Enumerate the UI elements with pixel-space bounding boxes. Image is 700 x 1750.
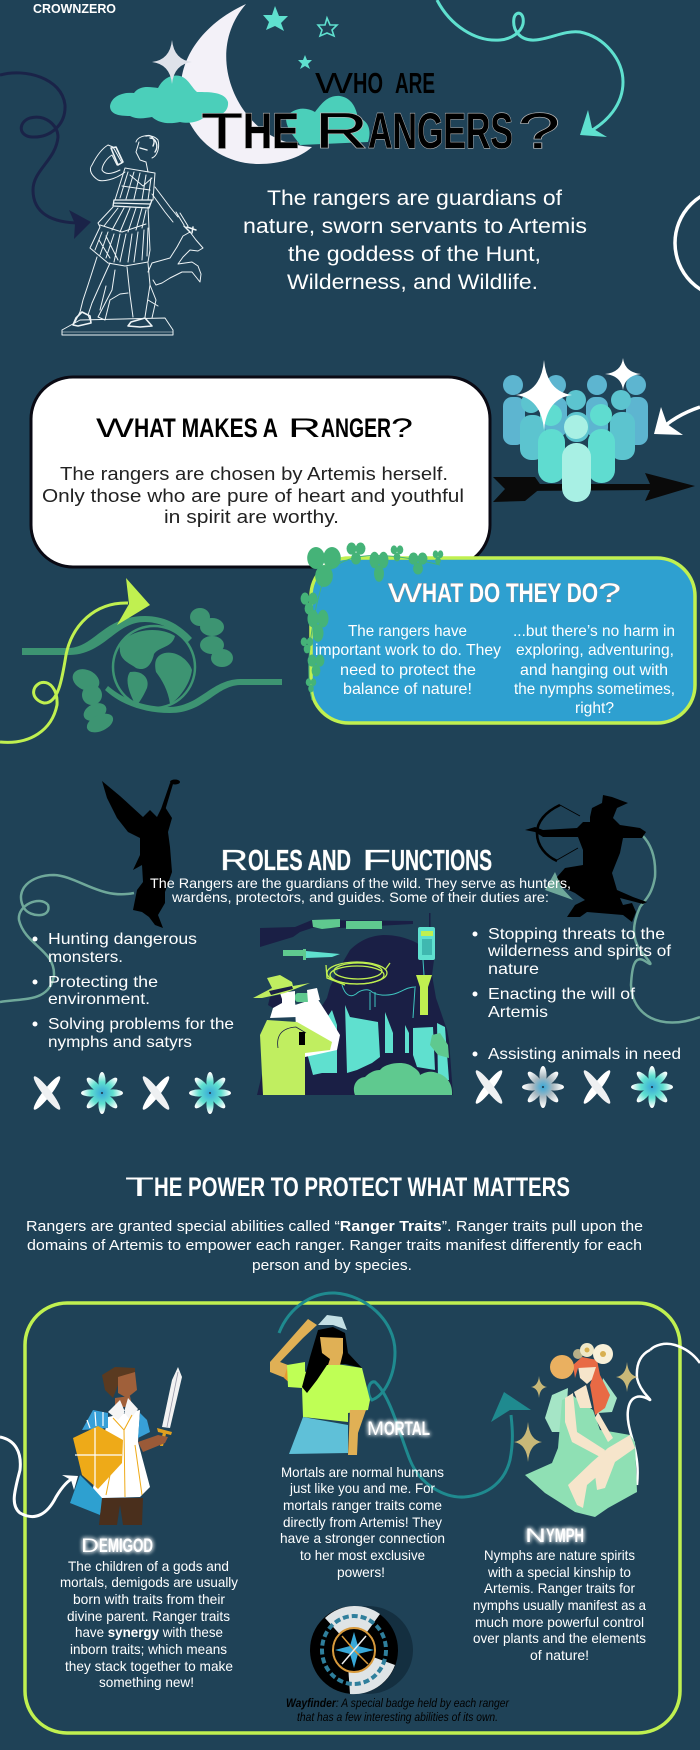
title: The Rangers?: ANGERS	[368, 103, 513, 159]
list: left duties: Protecting the	[48, 974, 158, 991]
heading: the power to protect: T	[125, 1172, 154, 1202]
icon: wayfinder badge	[310, 1606, 413, 1694]
illustration: globe with leaves	[22, 608, 282, 736]
arrow: teal loop around mortal	[279, 1293, 531, 1497]
label: demigod: D	[81, 1536, 99, 1557]
arrow: sage curl left	[0, 875, 134, 1002]
label: mortal: ORTAL	[384, 1419, 430, 1440]
icon: filled star	[263, 6, 288, 31]
list: right duties: Assisting animals in need	[488, 1046, 681, 1063]
list: left duties: Hunting dangerous	[48, 931, 197, 948]
icon: cloud left	[110, 76, 228, 123]
text: demigod description: divine parent. Ranger traits	[67, 1608, 230, 1624]
ranger head	[270, 995, 297, 1018]
list: right duties: Stopping threats to the	[488, 926, 665, 943]
rope	[326, 962, 390, 985]
heading: roles and functions: F	[362, 845, 391, 877]
icon: sparkle	[152, 40, 192, 84]
title: Who Are: HO	[353, 68, 383, 100]
text: chosen by Artemis: in spirit are worthy.	[164, 507, 339, 527]
text: wayfinder caption: Wayfinder: A special badge held by each ranger	[286, 1698, 510, 1710]
text: demigod description: The children of a gods and	[68, 1558, 229, 1574]
text: roles intro: The Rangers are the guardians of the wild. They serve as hunters,	[150, 875, 571, 891]
arrow: sage curl right	[545, 835, 700, 1023]
text: mortal description: have a stronger connection	[280, 1530, 445, 1546]
heading: the power to protect: HE POWER TO PROTECT WHAT MATTERS	[154, 1172, 570, 1202]
logo: CrownZero: CROWNZERO	[33, 1, 116, 16]
text: nymph description: of nature!	[530, 1647, 589, 1663]
label: nymph: YMPH	[546, 1526, 584, 1547]
arrow: navy curl	[0, 73, 91, 239]
text: wayfinder caption	[286, 1698, 510, 1724]
text: no harm in exploring	[513, 623, 675, 717]
intro paragraph: the goddess of the Hunt,	[288, 243, 541, 266]
text: mortal description: directly from Artemis! They	[283, 1514, 442, 1530]
list: right duties: Enacting the will of	[488, 986, 636, 1003]
title: Who Are	[315, 68, 435, 100]
ranger arm	[295, 998, 340, 1057]
silhouette: angel with trumpet	[102, 780, 180, 928]
text: mortal description: just like you and me. For	[289, 1480, 435, 1496]
text: nymph description: over plants and the elements	[473, 1630, 646, 1646]
text: nymph description	[473, 1547, 646, 1663]
arrow: white curl near nymph	[628, 1350, 650, 1485]
title: The Rangers?: R	[315, 103, 368, 159]
list: left duties: monsters.	[48, 949, 123, 966]
title: Who Are: W	[315, 68, 354, 100]
title: The Rangers?: ?	[518, 103, 560, 159]
list: right duties: Artemis	[488, 1004, 548, 1021]
text: demigod description: something new!	[99, 1674, 194, 1690]
text: important work	[315, 623, 501, 698]
text: nymph description: Artemis. Ranger traits for	[484, 1580, 635, 1596]
list: left duties: environment.	[48, 991, 150, 1008]
arrow: white loop top right	[650, 1344, 700, 1363]
heading: what do they do: HAT DO THEY DO	[422, 578, 598, 608]
text: demigod description: inborn traits; which means	[70, 1641, 227, 1657]
text: mortal description: Mortals are normal humans	[281, 1464, 444, 1480]
flashlight	[416, 975, 432, 1015]
ranger body	[260, 1020, 332, 1095]
heading: what makes a ranger: HAT MAKES A	[134, 413, 278, 443]
label: demigod	[81, 1536, 153, 1557]
intro paragraph: nature, sworn servants to Artemis	[243, 215, 587, 238]
text: no harm in exploring: right?	[575, 700, 614, 717]
text: mortal description: to her most exclusive	[300, 1547, 425, 1563]
label: nymph: N	[525, 1526, 546, 1547]
title: Who Are: ARE	[395, 68, 435, 100]
label: nymph	[525, 1526, 584, 1547]
heading: roles and functions: R	[220, 845, 248, 877]
intro paragraph	[243, 187, 587, 294]
text: mortal description	[280, 1464, 445, 1580]
text: nymph description: much more powerful control	[475, 1614, 644, 1630]
text: ranger traits intro: domains of Artemis to empower each ranger. Ranger traits manifest differently for each	[27, 1237, 642, 1254]
arrow: teal curl	[437, 0, 623, 137]
title: The Rangers?: HE	[243, 103, 299, 159]
heading: what makes a ranger: ANGER	[321, 413, 391, 443]
dark backdrop	[257, 935, 453, 1095]
icon: cloud right	[286, 96, 370, 145]
text: chosen by Artemis	[42, 464, 464, 527]
text: important work: The rangers have	[348, 623, 467, 640]
trees	[307, 1005, 449, 1080]
ring: white arc at right	[675, 188, 700, 298]
vines	[342, 960, 424, 1018]
text: demigod description: they stack together to make	[65, 1658, 233, 1674]
list: right duties: wilderness and spirits of	[487, 943, 672, 960]
label: mortal	[367, 1419, 430, 1440]
text: mortal description: powers!	[337, 1564, 385, 1580]
illustration: Artemis statue with deer	[62, 136, 203, 335]
heading: roles and functions: OLES AND	[248, 845, 351, 877]
list: left duties	[32, 931, 234, 1051]
panel: what do they do	[311, 558, 695, 723]
heading: what makes a ranger	[96, 413, 413, 443]
text: wayfinder caption: that has a few interesting abilities of its own.	[297, 1712, 498, 1724]
text: demigod description: have synergy with these	[75, 1624, 223, 1640]
text: chosen by Artemis: The rangers are chosen by Artemis herself.	[60, 464, 448, 484]
icon: crowd of people	[503, 358, 648, 502]
decoration: clover vine	[301, 543, 443, 700]
text: chosen by Artemis: Only those who are pure of heart and youthful	[42, 486, 464, 506]
text: demigod description: mortals, demigods are usually	[60, 1574, 238, 1590]
text: demigod description: born with traits from their	[73, 1591, 225, 1607]
text: nymph description: with a special kinship to	[487, 1564, 631, 1580]
text: no harm in exploring: exploring, adventuring,	[516, 642, 674, 659]
illustration: ranger with gear	[253, 913, 453, 1095]
label: demigod: EMIGOD	[99, 1536, 153, 1557]
radio	[418, 913, 435, 960]
knife	[283, 949, 340, 960]
text: no harm in exploring: the nymphs sometimes,	[514, 681, 675, 698]
list: left duties: nymphs and satyrs	[48, 1034, 192, 1051]
heading: what do they do: ?	[598, 578, 621, 608]
label: mortal: M	[367, 1419, 384, 1440]
text: ranger traits intro	[26, 1218, 643, 1274]
bush	[354, 1063, 452, 1095]
text: important work: important work to do. They	[315, 642, 501, 659]
text: mortal description: mortals ranger traits come	[283, 1497, 442, 1513]
arrow: white curl to demigod	[0, 1437, 78, 1517]
text: no harm in exploring: and hanging out with	[520, 662, 668, 679]
icon: crescent moon	[181, 4, 312, 164]
illustration: nymph figure	[525, 1343, 637, 1517]
title: The Rangers?: T	[201, 103, 243, 159]
decoration: nymph sparkles	[514, 1362, 638, 1462]
arrow: white arrow to crowd	[654, 407, 700, 435]
list: right duties: nature	[488, 961, 539, 978]
list: left duties: Solving problems for the	[48, 1016, 234, 1033]
heading: roles and functions	[220, 845, 492, 877]
text: nymph description: Nymphs are nature spirits	[484, 1547, 635, 1563]
text: important work: balance of nature!	[343, 681, 472, 698]
arrow: black arrow behind crowd	[493, 473, 695, 502]
text: ranger traits intro: person and by species.	[252, 1257, 412, 1274]
title: The Rangers?	[201, 103, 560, 159]
icon: outline star	[318, 18, 337, 36]
intro paragraph: The rangers are guardians of	[267, 187, 562, 210]
illustration: demigod figure	[70, 1367, 182, 1525]
panel: what makes a ranger	[31, 377, 490, 567]
decoration: left flowers	[31, 1072, 231, 1114]
arrow: lime curl to globe	[0, 578, 150, 742]
text: roles intro: wardens, protectors, and guides. Some of their duties are:	[171, 889, 549, 905]
heading: roles and functions: UNCTIONS	[391, 845, 492, 877]
silhouette: archer	[525, 795, 647, 922]
text: demigod description	[60, 1558, 238, 1690]
text: nymph description: nymphs usually manifest as a	[473, 1597, 646, 1613]
icon: small star	[298, 55, 312, 69]
ranger hat	[253, 975, 310, 998]
heading: what makes a ranger: W	[96, 413, 135, 443]
text: no harm in exploring: ...but there’s no harm in	[513, 623, 675, 640]
panel: traits frame	[25, 1303, 680, 1733]
heading: what makes a ranger: R	[288, 413, 321, 443]
decoration: right flowers	[473, 1066, 673, 1108]
intro paragraph: Wilderness, and Wildlife.	[287, 271, 538, 294]
text: important work: need to protect the	[340, 662, 476, 679]
rifle	[260, 919, 413, 947]
heading: what makes a ranger: ?	[391, 413, 413, 443]
text: ranger traits intro: Rangers are granted special abilities called “ Ranger Traits ”. Ranger traits pull upon the	[26, 1218, 643, 1235]
illustration: mortal figure	[270, 1315, 370, 1455]
list: right duties	[472, 926, 681, 1063]
text: roles intro	[150, 875, 571, 905]
heading: what do they do: W	[388, 578, 423, 608]
